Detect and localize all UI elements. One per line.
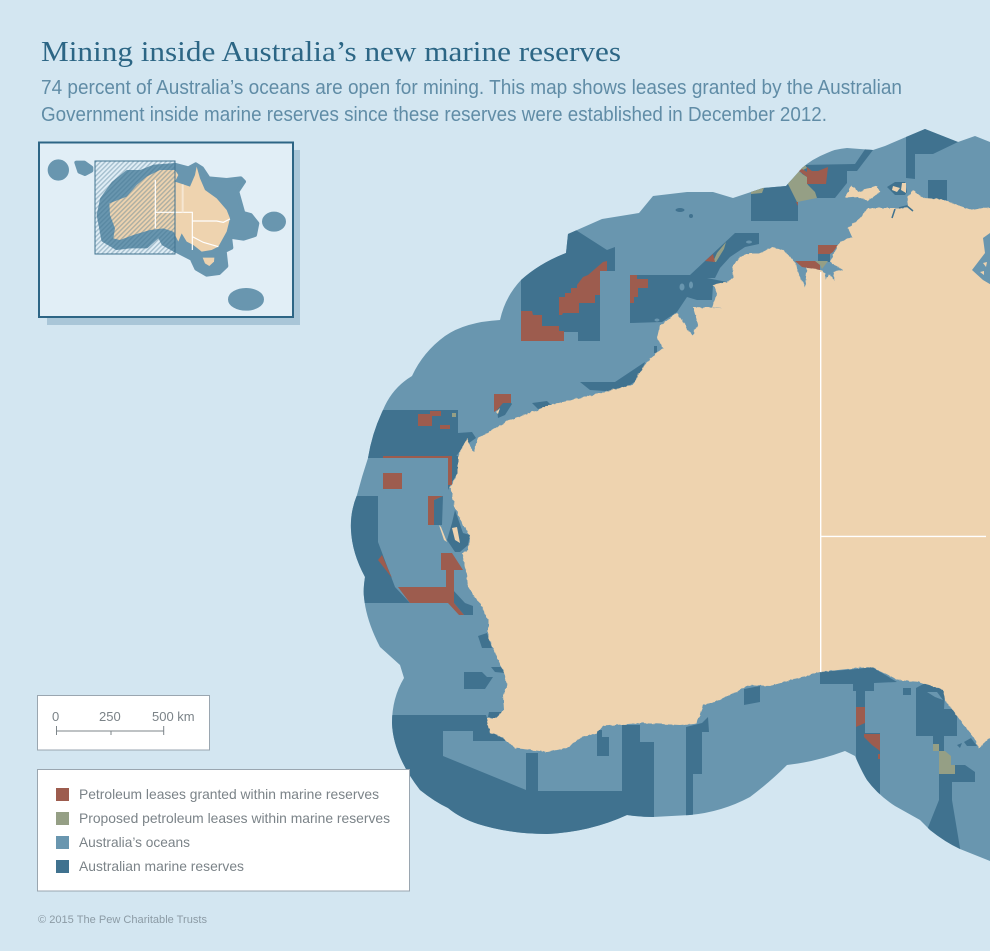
legend: reserves: Australian marine reserves	[79, 858, 244, 874]
title: Mining inside Australia’s new marine reserves	[41, 36, 621, 68]
inset extent outline	[95, 161, 175, 254]
subtitle: Government inside marine reserves since these reserves were established in December 2012.	[41, 104, 827, 126]
land: Melville and Bathurst islands	[845, 185, 880, 201]
scale labels: 500 km	[152, 709, 195, 724]
scale labels	[52, 709, 195, 724]
islets	[654, 208, 943, 700]
inset state borders	[155, 180, 230, 250]
inset hatched extent	[95, 161, 175, 254]
Shark Bay and northern detail	[439, 183, 990, 543]
subtitle	[41, 77, 902, 126]
inset land	[109, 167, 230, 266]
legend	[38, 770, 410, 891]
Australian land	[450, 190, 990, 752]
ocean area	[351, 129, 990, 861]
inset locator map	[39, 142, 300, 325]
copyright: © 2015 The Pew Charitable Trusts	[38, 914, 207, 926]
inset shadow	[47, 150, 300, 325]
proposed petroleum leases	[452, 160, 955, 774]
marine reserves	[335, 120, 977, 860]
state borders	[820, 272, 986, 672]
scale bar box	[38, 696, 210, 750]
subtitle: 74 percent of Australia’s oceans are open for mining. This map shows leases granted by the Australian	[41, 77, 902, 99]
legend: oceans: Australia’s oceans	[79, 834, 190, 850]
legend: proposed leases: Proposed petroleum leases within marine reserves	[79, 810, 390, 826]
legend: granted leases: Petroleum leases granted within marine reserves	[79, 786, 379, 802]
petroleum leases granted	[378, 167, 880, 759]
inset frame	[39, 142, 293, 317]
map: Western Australia marine reserves	[335, 120, 990, 861]
scale labels: 0	[52, 709, 59, 724]
inset ocean	[50, 161, 284, 309]
scale bar	[56, 726, 164, 735]
scale labels: 250	[99, 709, 121, 724]
